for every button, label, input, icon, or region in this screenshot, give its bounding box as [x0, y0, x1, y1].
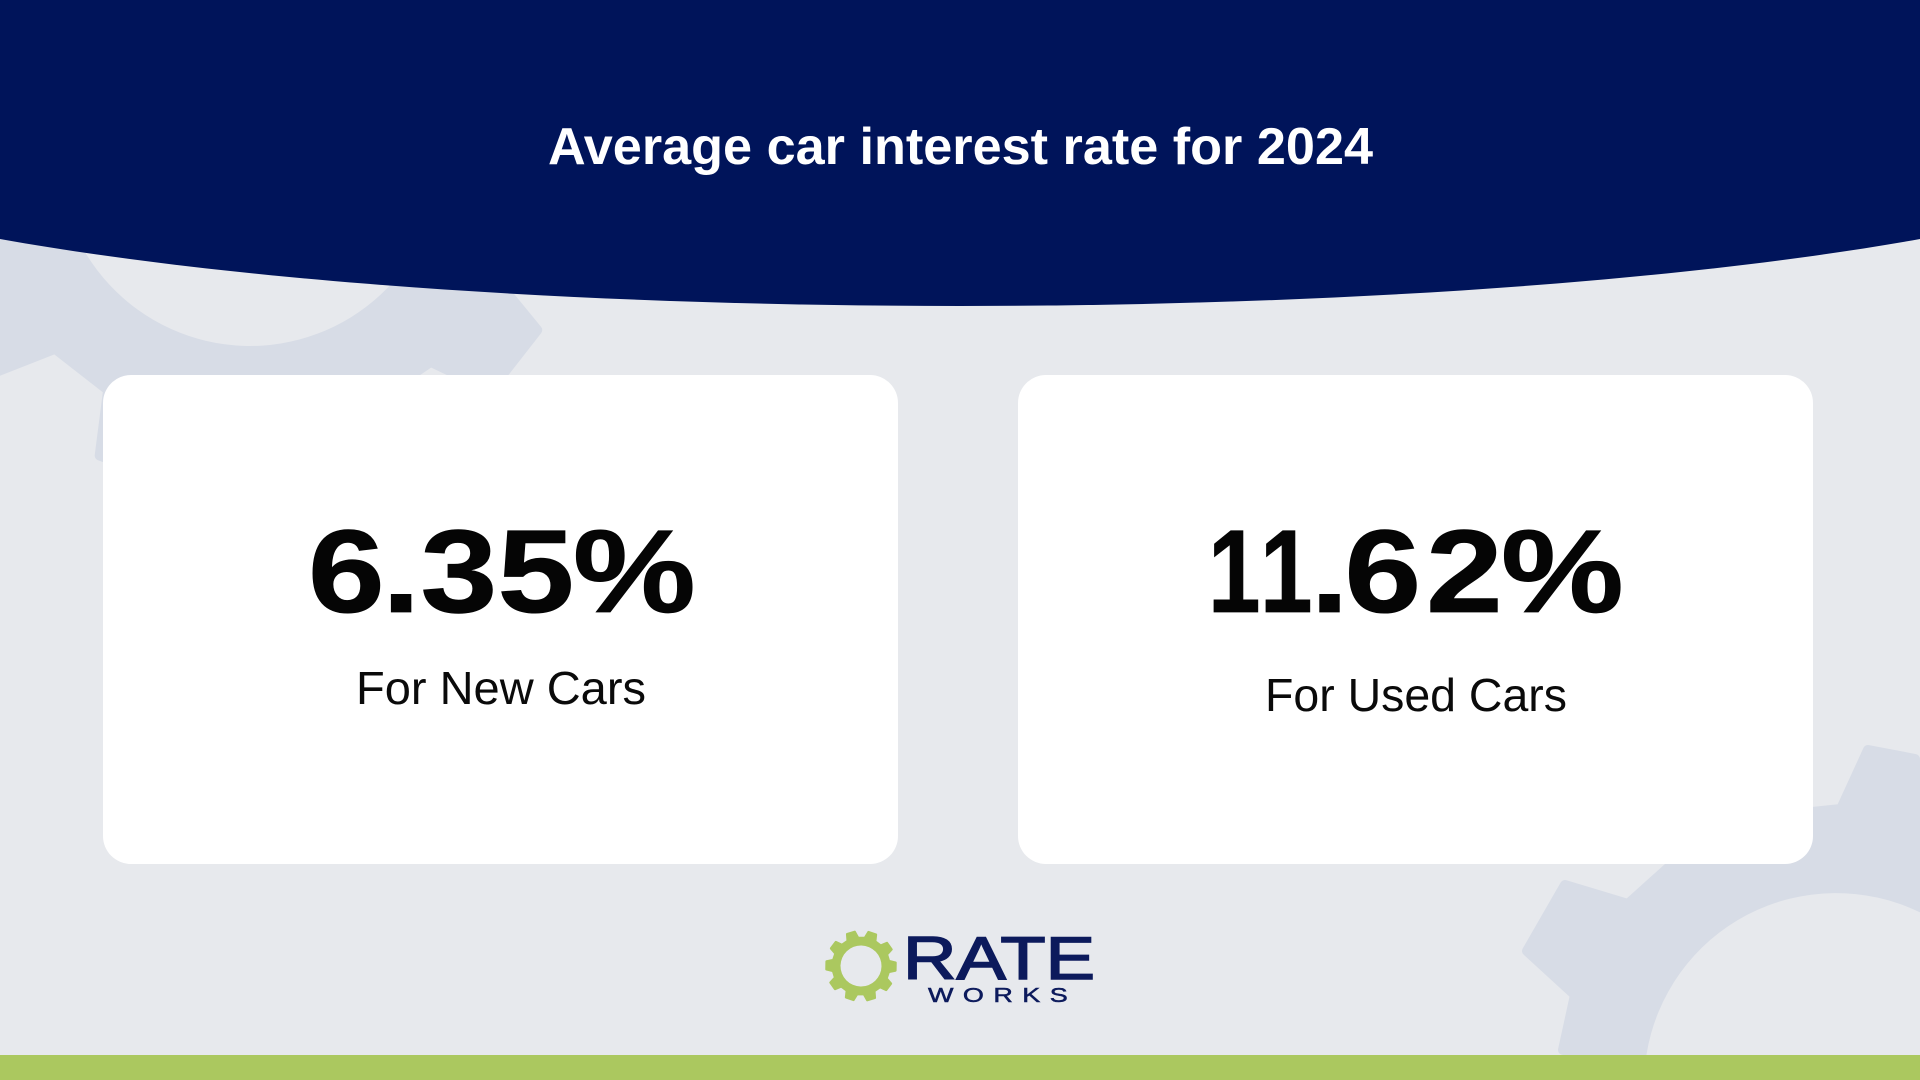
panel: new cars — [103, 375, 898, 864]
label: for used cars: For Used Cars — [1265, 669, 1567, 721]
logo wordmark: WORKS: WORKS — [928, 984, 1077, 1007]
background gear: top left — [0, 0, 596, 496]
footer bar — [0, 1055, 1920, 1080]
logo: Rate Works — [826, 925, 1095, 1007]
header banner — [0, 0, 1920, 306]
panel: used cars — [1018, 375, 1813, 864]
stat: used car rate: 11 — [1208, 505, 1312, 637]
icon: green gear — [826, 931, 896, 1001]
title: Average car interest rate for 2024 — [548, 118, 1373, 176]
label: for new cars: For New Cars — [356, 662, 646, 714]
stat: new car rate: 6.35% — [308, 506, 696, 638]
logo wordmark: RATE: RATE — [903, 925, 1095, 992]
stat: used car rate: .62% — [1310, 506, 1624, 638]
background gear: bottom right — [1527, 750, 1920, 1055]
